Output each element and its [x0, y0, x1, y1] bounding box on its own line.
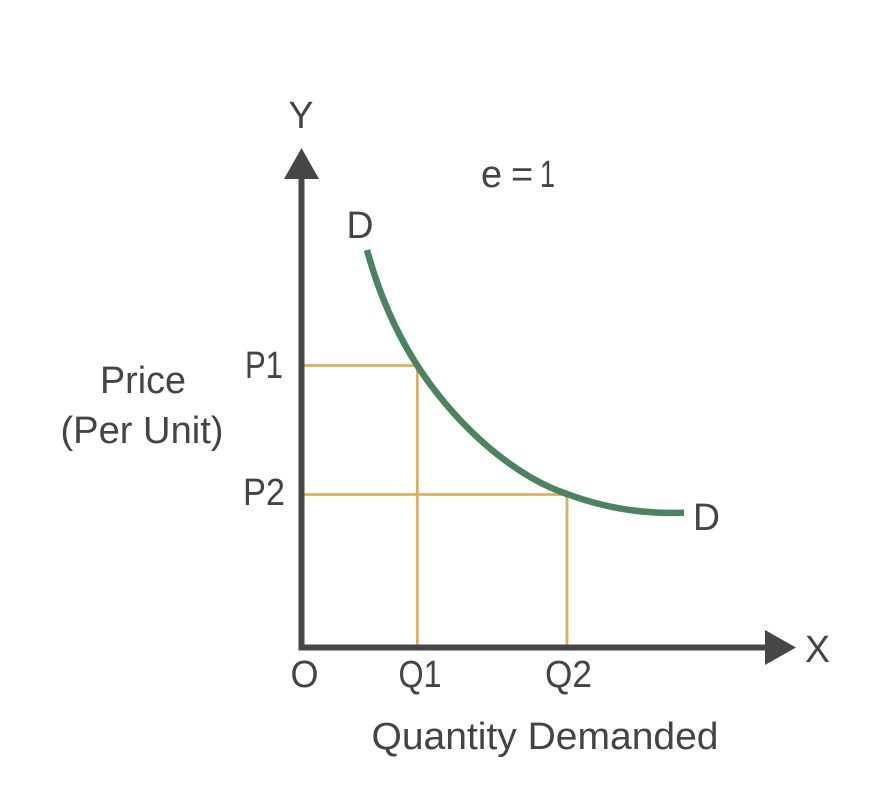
label: origin: O: [290, 654, 318, 696]
x axis with arrow: [298, 630, 796, 665]
label: Q1: Q1: [398, 654, 442, 696]
label: D bottom: D: [693, 497, 720, 539]
label: X axis: X: [805, 629, 830, 671]
label: elasticity: =: [511, 154, 533, 196]
label: elasticity: e: [481, 154, 502, 196]
label: elasticity: 1: [540, 154, 555, 196]
label: Q2: Q2: [545, 654, 592, 696]
y axis title: [60, 360, 224, 452]
x axis title: Quantity Demanded: [372, 716, 718, 758]
label: P1: P1: [245, 345, 283, 387]
label: elasticity: [481, 154, 555, 196]
label: Y axis: Y: [288, 95, 314, 137]
y axis title: Price: [100, 360, 186, 402]
label: P2: P2: [243, 472, 285, 514]
label: D top: D: [346, 205, 374, 247]
y axis title: (Per Unit): [60, 410, 224, 452]
y axis with arrow: [284, 148, 319, 650]
guide lines for P1, P2, Q1, Q2: [302, 366, 567, 648]
demand curve: [367, 250, 684, 513]
